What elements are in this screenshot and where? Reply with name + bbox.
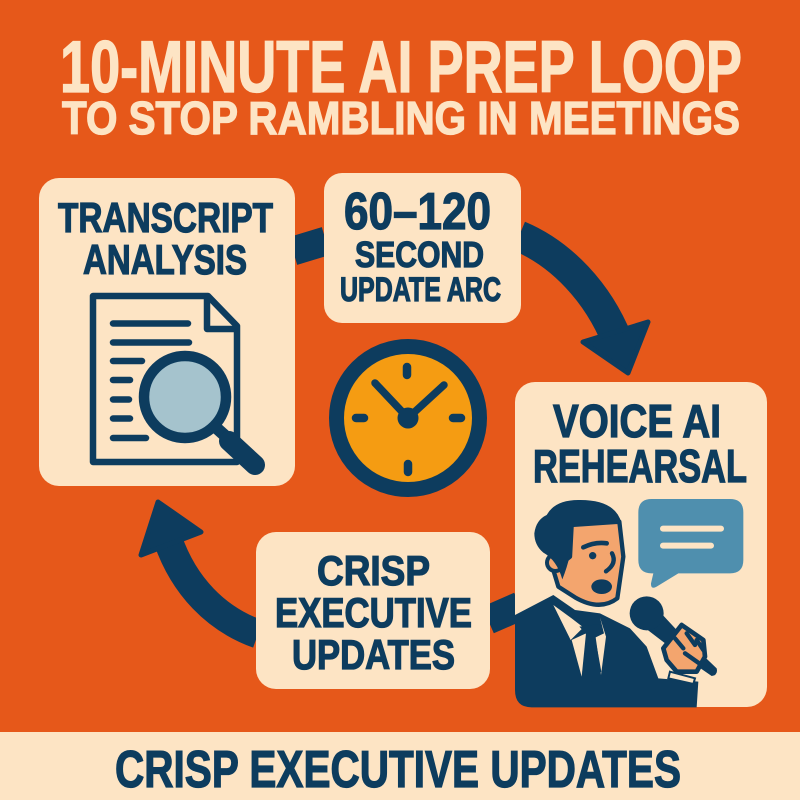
- panel: 60-120 second update arc: UPDATE ARC: [340, 271, 501, 309]
- panel: crisp executive updates: EXECUTIVE: [275, 589, 472, 636]
- suit: [515, 595, 698, 707]
- tie: [579, 624, 601, 682]
- neck and face: [553, 522, 623, 605]
- ear: [547, 554, 564, 571]
- cuff: [668, 672, 695, 684]
- microphone: [643, 607, 717, 676]
- shirt collar: [553, 605, 583, 640]
- panel: crisp executive updates: UPDATES: [292, 631, 455, 678]
- heading: voice ai rehearsal: VOICE AI: [553, 395, 721, 447]
- panel: transcript analysis: [39, 178, 295, 486]
- heading: voice ai rehearsal: [533, 395, 747, 492]
- panel: voice ai rehearsal: [515, 382, 767, 707]
- title: [60, 27, 742, 144]
- facial features: [583, 543, 614, 571]
- heading: transcript analysis: TRANSCRIPT: [58, 194, 273, 241]
- icon: document with magnifier: [93, 296, 255, 465]
- arrow: crisp updates to transcript analysis: [141, 502, 258, 634]
- arrow: analysis to update arc: [293, 241, 326, 251]
- arrow: voice rehearsal to crisp updates: [488, 606, 520, 620]
- panel: 60-120 second update arc: [324, 173, 521, 323]
- heading: transcript analysis: ANALYSIS: [83, 236, 247, 283]
- icon: speech bubble: [638, 499, 743, 588]
- panel: 60-120 second update arc: SECOND: [355, 234, 484, 275]
- icon: speaker with microphone: [515, 500, 717, 707]
- hand: [663, 625, 705, 672]
- icon: clock: [336, 346, 480, 490]
- panel: crisp executive updates: CRISP: [317, 547, 430, 594]
- panel: crisp executive updates: [256, 532, 490, 689]
- arrow: update arc to voice rehearsal: [519, 236, 648, 373]
- hair: [534, 500, 621, 579]
- panel: 60-120 second update arc: 60–120: [344, 183, 491, 241]
- heading: transcript analysis: [58, 194, 273, 283]
